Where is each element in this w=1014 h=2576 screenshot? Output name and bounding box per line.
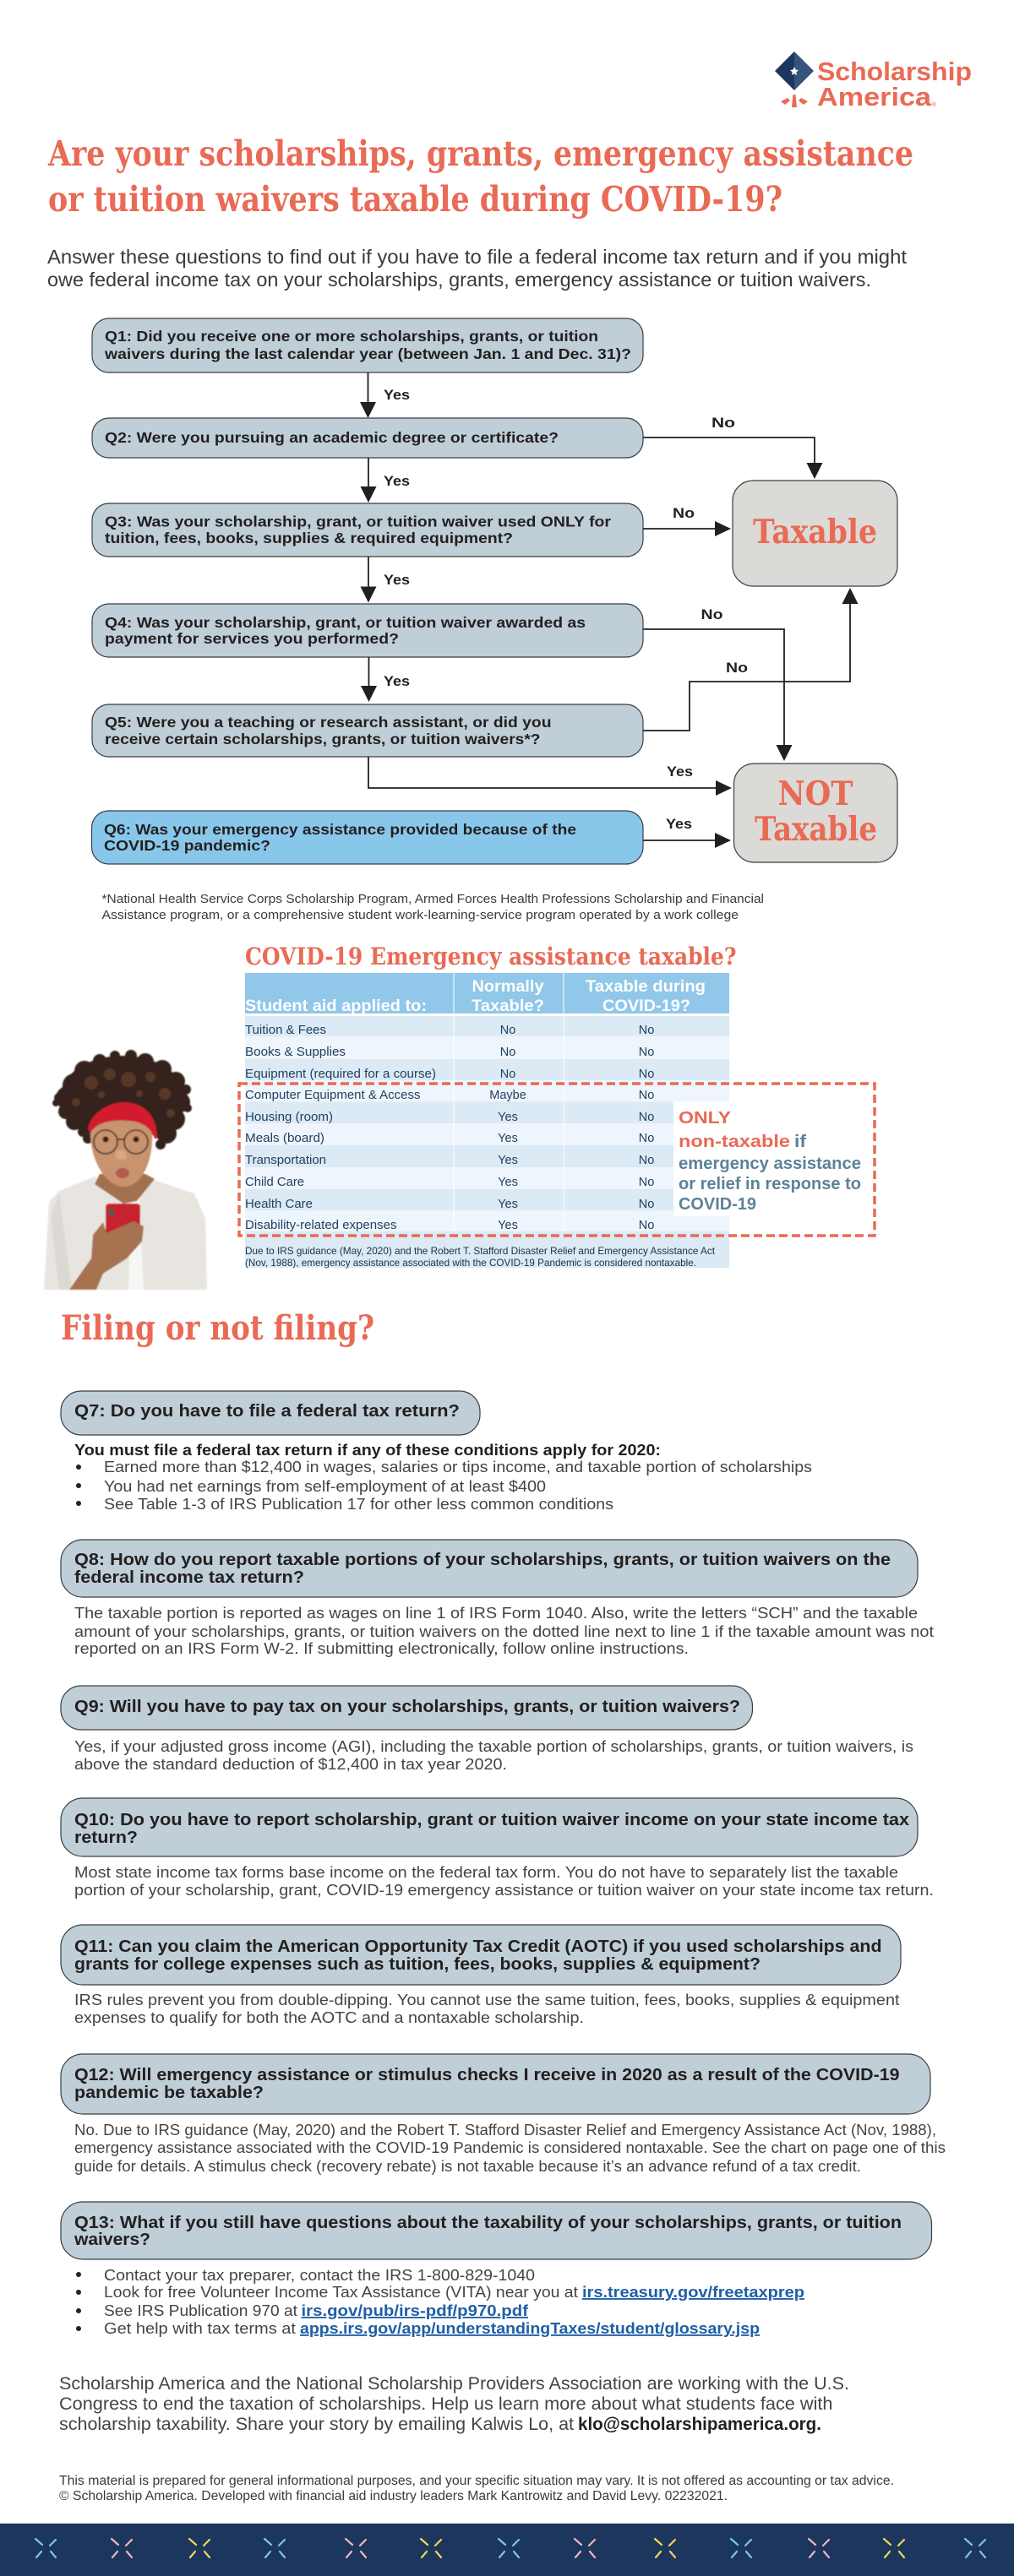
table rows: No — [639, 1154, 654, 1167]
answer: Most state income tax forms base income on the federal tax form. You do not have to separately list the taxable — [74, 1863, 898, 1881]
intro text: owe federal income tax on your scholarships, grants, emergency assistance or tuition waivers. — [47, 269, 871, 291]
panel: Q10 — [61, 1798, 934, 1899]
table rows: Computer Equipment & Access — [245, 1089, 421, 1102]
panel: Q13 — [61, 2202, 931, 2337]
question: waivers? — [74, 2231, 150, 2249]
answer list with links: irs.treasury.gov/freetaxprep — [582, 2283, 804, 2301]
callout: ONLY non-taxable: non-taxable — [679, 1133, 790, 1151]
answer — [74, 2121, 946, 2175]
callout: ONLY non-taxable: emergency assistance — [679, 1155, 861, 1173]
table rows: Maybe — [489, 1089, 526, 1102]
table header row: Normally — [472, 978, 544, 996]
heading: Filing or not filing: Filing or not filing? — [61, 1308, 374, 1348]
table header row: Taxable during — [586, 978, 706, 996]
arrow: Q3 yes — [360, 557, 410, 603]
Q6 box: Q6: Was your emergency assistance provided because of the — [104, 821, 576, 838]
table header row: COVID-19? — [602, 997, 690, 1015]
neck — [95, 1174, 155, 1204]
arrow: Q6 yes to Not Taxable: Yes — [666, 816, 692, 832]
table rows — [245, 973, 729, 1268]
Q3 box: Q3: Was your scholarship, grant, or tuition waiver used ONLY for — [105, 514, 611, 530]
arrow: Q5 no to Taxable: No — [726, 660, 748, 676]
answer: The taxable portion is reported as wages on line 1 of IRS Form 1040. Also, write the letters “SCH” and the taxable — [74, 1604, 918, 1622]
arrow: Q5 yes to Not Taxable: Yes — [667, 764, 693, 780]
outcome: NOT Taxable: Taxable — [755, 810, 877, 849]
footnote — [101, 892, 764, 922]
footer band with sparkle marks — [0, 2523, 1014, 2576]
answer: You must file a federal tax return if any of these conditions apply for 2020: — [74, 1441, 661, 1459]
answer list with links: Contact your tax preparer, contact the IRS 1-800-829-1040 — [104, 2266, 535, 2284]
dashed highlight box — [239, 1084, 875, 1236]
table rows: Transportation — [245, 1154, 326, 1167]
question: Q7: Do you have to file a federal tax return? — [74, 1402, 460, 1421]
table rows: Health Care — [245, 1198, 313, 1211]
table rows: No — [639, 1132, 654, 1145]
headband — [88, 1102, 157, 1139]
arrow: Q5 yes to Not Taxable — [368, 757, 732, 796]
footnote: *National Health Service Corps Scholarship Program, Armed Forces Health Professions Scholarship and Financial — [101, 892, 764, 906]
table header row: Taxable? — [472, 997, 544, 1015]
answer: No. Due to IRS guidance (May, 2020) and the Robert T. Stafford Disaster Relief and Emergency Assistance Act (Nov, 1988), — [74, 2121, 936, 2139]
table rows: No — [639, 1068, 654, 1081]
table rows: No — [639, 1176, 654, 1189]
panel: Q12 — [61, 2054, 946, 2175]
closing paragraph — [59, 2373, 849, 2434]
answer: Yes, if your adjusted gross income (AGI), including the taxable portion of scholarships, grants, or tuition waivers, is — [74, 1737, 913, 1755]
answer: See Table 1-3 of IRS Publication 17 for other less common conditions — [104, 1495, 613, 1513]
question — [61, 1798, 918, 1856]
outcome: NOT Taxable: NOT — [777, 774, 853, 813]
question: Q12: Will emergency assistance or stimulus checks I receive in 2020 as a result of the COVID-19 — [74, 2066, 899, 2084]
phone — [106, 1204, 140, 1237]
table rows: No — [639, 1024, 654, 1037]
table rows: Yes — [498, 1111, 518, 1124]
answer list with links: apps.irs.gov/app/understandingTaxes/student/glossary.jsp — [300, 2319, 760, 2337]
question: Q13: What if you still have questions about the taxability of your scholarships, grants, or tuition — [74, 2214, 902, 2232]
Q3 box: tuition, fees, books, supplies & required equipment? — [105, 530, 513, 546]
answer: expenses to qualify for both the AOTC and a nontaxable scholarship. — [74, 2008, 584, 2026]
arrow: Q3 no to Taxable — [643, 505, 731, 536]
table rows: No — [500, 1068, 515, 1081]
question: grants for college expenses such as tuition, fees, books, supplies & equipment? — [74, 1955, 760, 1974]
arrow: Q2 yes: Yes — [384, 473, 410, 489]
logo: Scholarship America: Scholarship — [817, 57, 972, 86]
question — [61, 2202, 931, 2259]
answer: emergency assistance associated with the COVID-19 Pandemic is considered nontaxable. See the chart on page one of this — [74, 2139, 946, 2156]
logo: Scholarship America: ® — [932, 101, 937, 108]
table rows: Yes — [498, 1154, 518, 1167]
answer: IRS rules prevent you from double-dipping. You cannot use the same tuition, fees, books, supplies & equipment — [74, 1991, 899, 2008]
question: Q8: How do you report taxable portions of your scholarships, grants, or tuition waivers on the — [74, 1551, 891, 1569]
face — [90, 1120, 152, 1187]
arrow: Q2 no to Taxable: No — [711, 415, 735, 431]
answer — [74, 1604, 934, 1657]
table rows: Meals (board) — [245, 1132, 324, 1145]
Q1 box: waivers during the last calendar year (between Jan. 1 and Dec. 31)? — [104, 345, 631, 362]
arrow: Q6 yes to Not Taxable — [643, 816, 731, 848]
table rows: No — [639, 1198, 654, 1211]
answer: Earned more than $12,400 in wages, salaries or tips income, and taxable portion of scholarships — [104, 1458, 812, 1475]
Q6 box: COVID-19 pandemic? — [104, 837, 270, 854]
question: return? — [74, 1829, 138, 1847]
panel: COVID-19 emergency assistance table — [239, 943, 875, 1269]
arrow: Q4 no to Not Taxable: No — [701, 606, 723, 622]
table note: Due to IRS guidance (May, 2020) and the Robert T. Stafford Disaster Relief and Emergency Assistance Act — [245, 1245, 716, 1257]
closing paragraph: Scholarship America and the National Scholarship Providers Association are working with the U.S. — [59, 2373, 849, 2394]
shirt — [44, 1177, 207, 1290]
outcome: Taxable — [733, 481, 897, 586]
question: pandemic be taxable? — [74, 2084, 264, 2102]
table rows: No — [500, 1046, 515, 1059]
table rows: Yes — [498, 1176, 518, 1189]
table rows: No — [639, 1089, 654, 1102]
question: Q11: Can you claim the American Opportunity Tax Credit (AOTC) if you used scholarships and — [74, 1937, 882, 1956]
Q2 box: Q2: Were you pursuing an academic degree or certificate? — [105, 429, 559, 446]
table rows: Yes — [498, 1219, 518, 1232]
closing paragraph: klo@scholarshipamerica.org. — [578, 2414, 821, 2434]
logo: Scholarship America — [775, 52, 972, 111]
title: or tuition waivers taxable during COVID-19? — [48, 179, 782, 220]
table heading: COVID-19 Emergency assistance taxable? — [245, 943, 737, 970]
title — [47, 133, 913, 220]
nose and lips — [116, 1150, 127, 1160]
callout: ONLY non-taxable: ONLY — [679, 1109, 732, 1128]
outcome: NOT Taxable — [733, 764, 897, 862]
table note: (Nov, 1988), emergency assistance associated with the COVID-19 Pandemic is considered nontaxable. — [245, 1257, 696, 1269]
answer: portion of your scholarship, grant, COVID-19 emergency assistance or tuition waiver on your state income tax return. — [74, 1881, 934, 1899]
arrow: Q4 yes: Yes — [384, 673, 410, 689]
answer list with links — [76, 2266, 804, 2337]
arrow: Q2 no to Taxable — [643, 415, 823, 479]
hair — [52, 1050, 192, 1149]
answer list with links: Get help with tax terms at — [104, 2319, 296, 2337]
arrow: Q3 no to Taxable: No — [673, 505, 695, 521]
Q1 box — [92, 318, 643, 372]
hand — [69, 1221, 144, 1290]
arrow: Q4 no to Not Taxable — [643, 606, 793, 761]
answer — [74, 1441, 812, 1513]
panel: flowchart — [91, 318, 897, 864]
panel: Q8 — [61, 1540, 934, 1657]
answer list with links: irs.gov/pub/irs-pdf/p970.pdf — [301, 2302, 529, 2319]
arrow: Q5 no to Taxable — [643, 588, 859, 731]
answer: above the standard deduction of $12,400 in tax year 2020. — [74, 1755, 507, 1773]
answer list with links: See IRS Publication 970 at — [104, 2302, 297, 2319]
Q4 box: payment for services you performed? — [105, 630, 399, 647]
answer: reported on an IRS Form W-2. If submitting electronically, follow online instructions. — [74, 1639, 689, 1657]
panel: Q9 — [61, 1686, 913, 1773]
arrow: Q2 yes — [360, 458, 410, 503]
intro text: Answer these questions to find out if you have to file a federal income tax return and if you might — [47, 246, 908, 268]
table rows: No — [639, 1046, 654, 1059]
arrow: Q4 yes — [361, 657, 410, 702]
panel: Q11 — [61, 1925, 901, 2026]
callout: ONLY non-taxable: if — [794, 1133, 806, 1151]
table rows: No — [500, 1024, 515, 1037]
Q2 box — [92, 418, 643, 458]
table rows: Tuition & Fees — [245, 1024, 326, 1037]
table header row — [245, 973, 729, 1015]
Q1 box: Q1: Did you receive one or more scholarships, grants, or tuition — [105, 328, 598, 345]
question: Q10: Do you have to report scholarship, grant or tuition waiver income on your state income tax — [74, 1811, 909, 1829]
outcome: Taxable: Taxable — [753, 513, 877, 552]
callout: ONLY non-taxable — [673, 1101, 861, 1216]
answer — [74, 1863, 934, 1899]
arrow: Q1 yes — [360, 372, 410, 418]
disclaimer: © Scholarship America. Developed with financial aid industry leaders Mark Kantrowitz and David Levy. 02232021. — [59, 2489, 728, 2503]
table rows: No — [639, 1219, 654, 1232]
table header row: Student aid applied to: — [245, 997, 427, 1015]
answer — [74, 1737, 913, 1773]
table rows: No — [639, 1111, 654, 1124]
Q5 box: Q5: Were you a teaching or research assistant, or did you — [105, 714, 551, 731]
disclaimer — [59, 2474, 894, 2503]
intro text — [47, 246, 908, 291]
glasses — [94, 1130, 148, 1154]
table note — [245, 1245, 716, 1269]
Q4 box: Q4: Was your scholarship, grant, or tuition waiver awarded as — [105, 614, 586, 631]
question — [61, 2054, 930, 2114]
question: Q9: Will you have to pay tax on your scholarships, grants, or tuition waivers? — [74, 1698, 740, 1716]
table rows: Equipment (required for a course) — [245, 1068, 436, 1081]
Q3 box — [92, 503, 643, 557]
Q5 box: receive certain scholarships, grants, or tuition waivers*? — [105, 731, 541, 747]
table rows: Books & Supplies — [245, 1046, 346, 1059]
arrow: Q3 yes: Yes — [384, 572, 410, 588]
question — [61, 1540, 918, 1597]
logo: Scholarship America: America — [817, 82, 932, 111]
question — [61, 1391, 480, 1435]
closing paragraph: Congress to end the taxation of scholarships. Help us learn more about what students face with — [59, 2394, 832, 2414]
callout: ONLY non-taxable: or relief in response to — [679, 1175, 861, 1193]
icon: surprised woman looking at phone — [44, 1050, 207, 1290]
Q4 box — [92, 604, 643, 657]
answer list with links: Look for free Volunteer Income Tax Assistance (VITA) near you at — [104, 2283, 578, 2301]
answer: amount of your scholarships, grants, or tuition waivers on the dotted line next to line 1 if the taxable amount was not — [74, 1622, 934, 1640]
arrow: Q1 yes: Yes — [384, 387, 410, 403]
footnote: Assistance program, or a comprehensive student work-learning-service program operated by a work college — [101, 908, 739, 922]
Q5 box — [92, 704, 643, 757]
table rows: Disability-related expenses — [245, 1219, 397, 1232]
answer: guide for details. A stimulus check (recovery rebate) is not taxable because it’s an advance refund of a tax credit. — [74, 2157, 861, 2175]
disclaimer: This material is prepared for general informational purposes, and your specific situation may vary. It is not offered as accounting or tax advice. — [59, 2474, 894, 2488]
panel: Q7 — [61, 1391, 812, 1513]
table rows: Yes — [498, 1132, 518, 1145]
closing paragraph: scholarship taxability. Share your story by emailing Kalwis Lo, at — [59, 2414, 574, 2434]
question — [61, 1925, 901, 1985]
Q6 box — [91, 811, 643, 864]
question: federal income tax return? — [74, 1568, 304, 1587]
answer — [74, 1991, 899, 2026]
table rows: Housing (room) — [245, 1111, 333, 1124]
table rows: Yes — [498, 1198, 518, 1211]
question — [61, 1686, 752, 1730]
table rows: Child Care — [245, 1176, 304, 1189]
answer: You had net earnings from self-employment of at least $400 — [104, 1477, 546, 1495]
callout: ONLY non-taxable: COVID-19 — [679, 1195, 756, 1214]
